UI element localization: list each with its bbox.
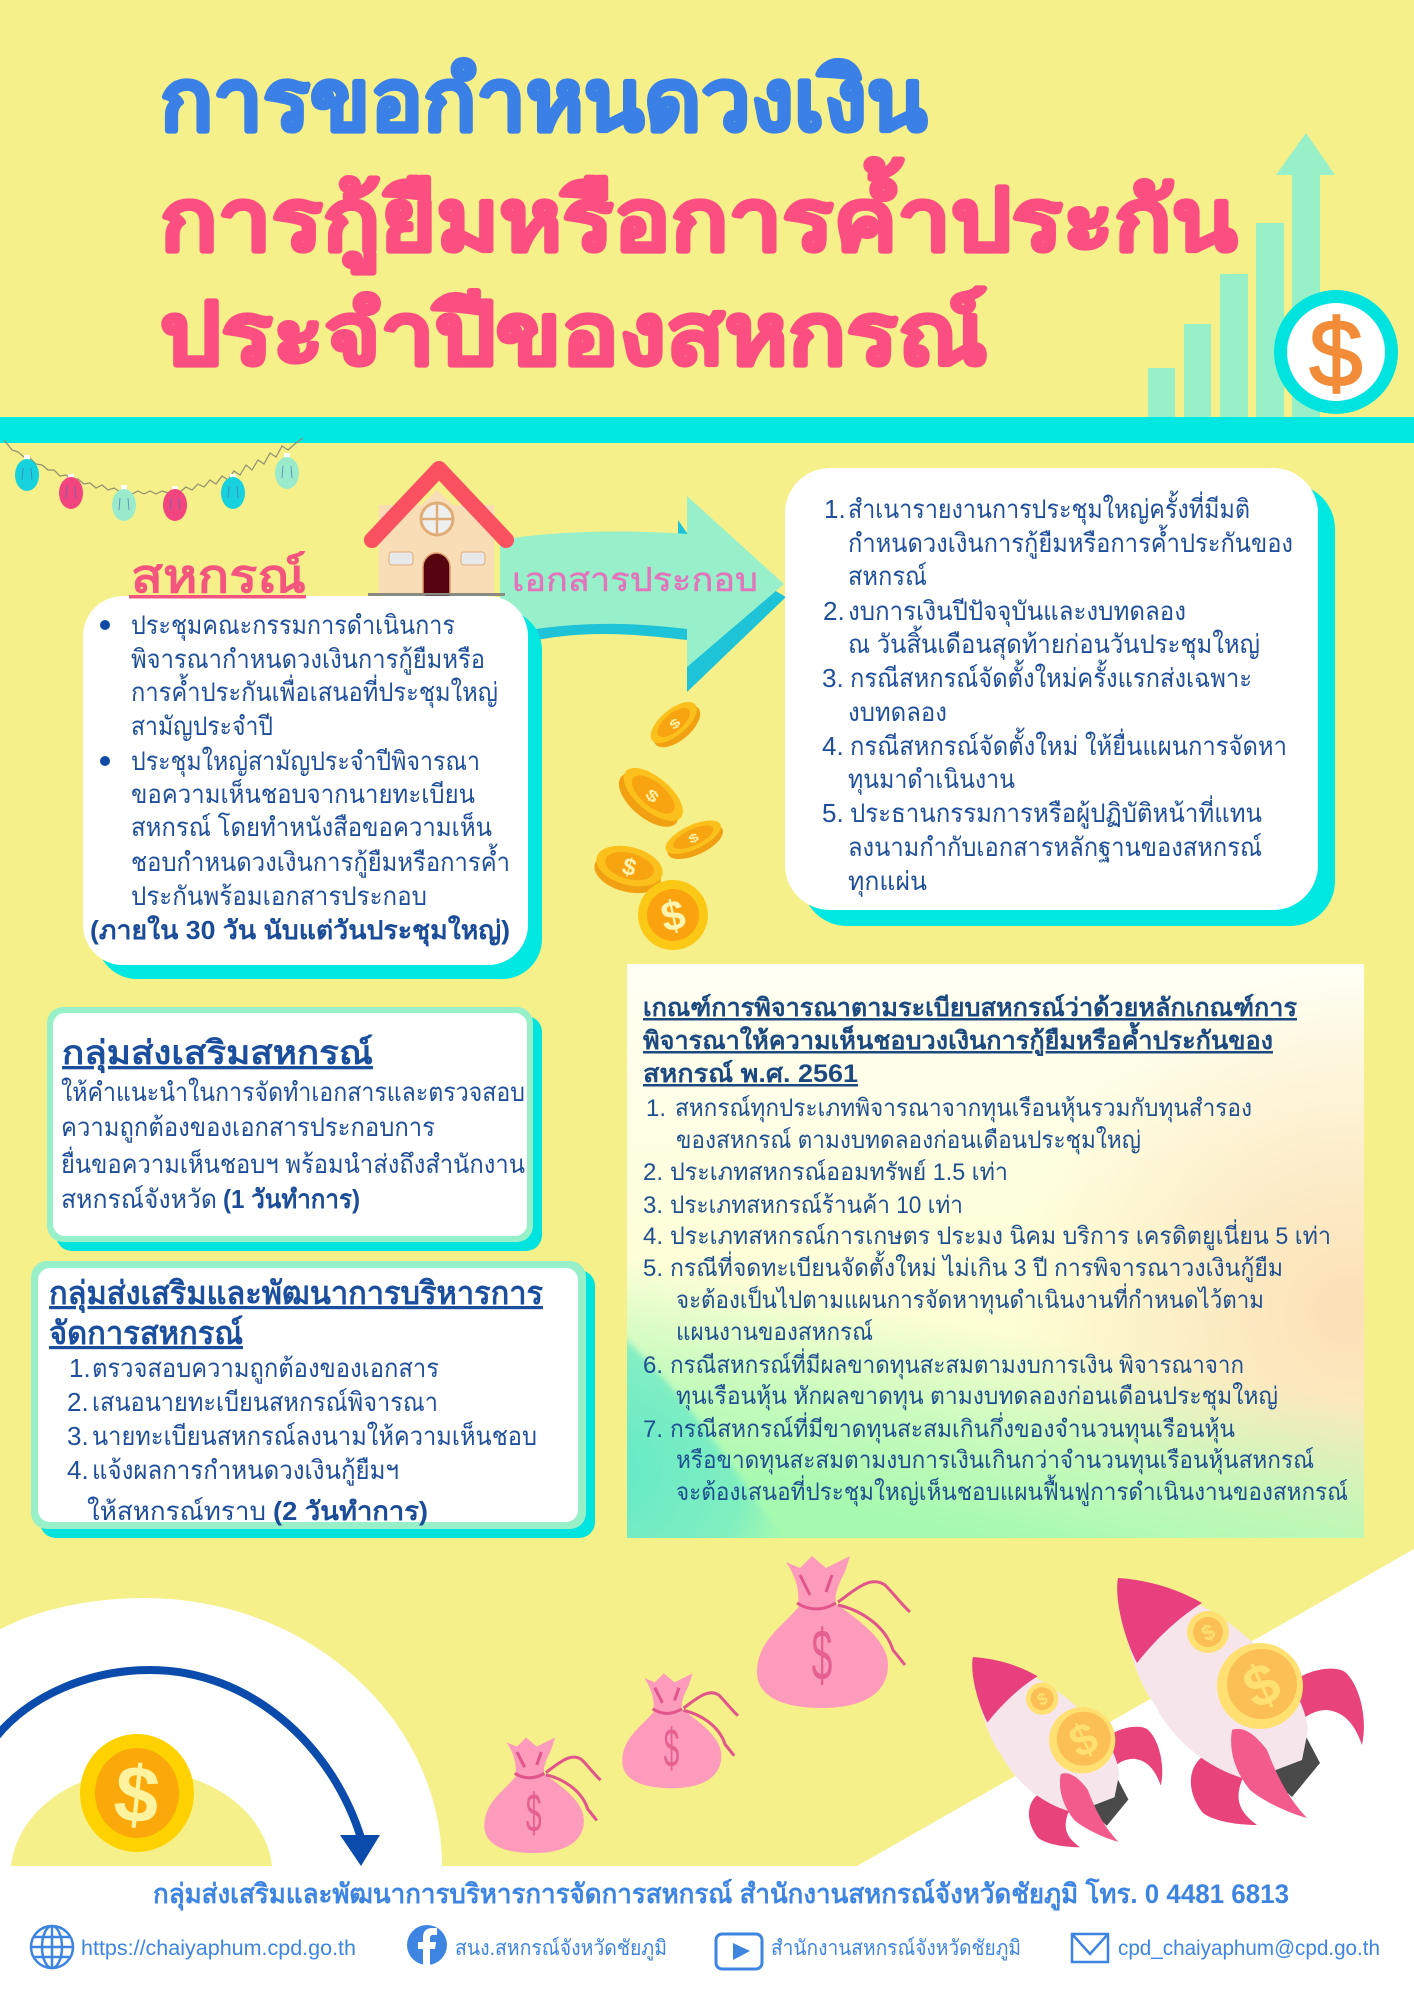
panel list text: 4. [67, 1455, 89, 1485]
bullet list text: พิจารณากำหนดวงเงินการกู้ยืมหรือ [131, 644, 485, 675]
panel: cooperative procedure [83, 596, 542, 979]
money bag small [484, 1738, 601, 1853]
panel heading: กลุ่มส่งเสริมและพัฒนาการบริหารการ [49, 1275, 543, 1314]
falling gold coins: $ [667, 716, 684, 733]
numbered list text: 1. [824, 494, 846, 524]
numbered list text: งบการเงินปีปัจจุบันและงบทดลอง [848, 596, 1186, 627]
title: การขอกำหนดวงเงิน [160, 53, 927, 149]
numbered list text: สำเนารายงานการประชุมใหญ่ครั้งที่มีมติ [848, 490, 1250, 525]
panel body text [61, 1077, 525, 1214]
arrow: documents [500, 496, 786, 692]
icon: facebook [407, 1925, 447, 1966]
bullet list text: ประกันพร้อมเอกสารประกอบ [131, 881, 427, 911]
teal divider band [0, 417, 1414, 443]
rocket small: $ [1062, 1713, 1106, 1768]
icon: globe [31, 1926, 73, 1968]
criteria list: กรณีสหกรณ์ที่มีผลขาดทุนสะสมตามงบการเงิน พิจารณาจาก [670, 1348, 1244, 1380]
bullet list text: สามัญประจำปี [131, 711, 273, 741]
criteria list: จะต้องเป็นไปตามแผนการจัดหาทุนดำเนินงานที่กำหนดไว้ตาม [676, 1283, 1264, 1315]
email address: cpd_chaiyaphum@cpd.go.th [1118, 1937, 1380, 1960]
growth chart icon [1148, 133, 1335, 418]
criteria list: 7. [643, 1416, 663, 1443]
numbered list text: กรณีสหกรณ์จัดตั้งใหม่ ให้ยื่นแผนการจัดหา [850, 727, 1287, 761]
panel body text: สหกรณ์จังหวัด [61, 1184, 217, 1214]
falling gold coins: $ [641, 786, 662, 807]
criteria list: 5. [643, 1255, 663, 1282]
criteria heading [643, 993, 1298, 1088]
panel list text [67, 1353, 537, 1526]
numbered list text: ลงนามกำกับเอกสารหลักฐานของสหกรณ์ [848, 832, 1262, 863]
panel list text: 1. [69, 1353, 91, 1383]
panel list text: (2 วันทำการ) [273, 1496, 428, 1526]
panel: required documents [785, 468, 1335, 926]
numbered list text: กำหนดวงเงินการกู้ยืมหรือการค้ำประกันของ [848, 524, 1293, 559]
bullet list text: (ภายใน 30 วัน นับแต่วันประชุมใหญ่) [90, 915, 510, 947]
criteria list: 1. [646, 1095, 666, 1122]
criteria list: กรณีสหกรณ์ที่มีขาดทุนสะสมเกินกึ่งของจำนวนทุนเรือนหุ้น [670, 1412, 1235, 1444]
criteria list: ประเภทสหกรณ์ร้านค้า 10 เท่า [670, 1191, 963, 1219]
panel heading: จัดการสหกรณ์ [49, 1315, 243, 1351]
website: https://chaiyaphum.cpd.go.th [81, 1937, 356, 1960]
white diagonal background [857, 1549, 1414, 1866]
footer [0, 1866, 1414, 2000]
criteria list: ของสหกรณ์ ตามงบทดลองก่อนเดือนประชุมใหญ่ [676, 1126, 1141, 1155]
criteria list: สหกรณ์ทุกประเภทพิจารณาจากทุนเรือนหุ้นรวมกับทุนสำรอง [675, 1094, 1252, 1123]
falling gold coins [590, 695, 728, 950]
bullet list text: ชอบกำหนดวงเงินการกู้ยืมหรือการค้ำ [131, 843, 510, 878]
youtube channel name: สำนักงานสหกรณ์จังหวัดชัยภูมิ [771, 1936, 1021, 1961]
bullet list text: ประชุมคณะกรรมการดำเนินการ [131, 610, 455, 641]
icon: large gold coin: $ [110, 1748, 164, 1841]
numbered list text [822, 490, 1293, 897]
criteria list: 2. [643, 1159, 663, 1186]
rocket large: $ [1197, 1619, 1219, 1646]
bullet list text [90, 610, 510, 947]
falling gold coins: $ [686, 830, 702, 847]
facebook page name: สนง.สหกรณ์จังหวัดชัยภูมิ [455, 1936, 667, 1961]
numbered list text: 3. [822, 663, 844, 693]
numbered list text: ประธานกรรมการหรือผู้ปฏิบัติหน้าที่แทน [850, 795, 1262, 829]
panel list text: แจ้งผลการกำหนดวงเงินกู้ยืมฯ [92, 1455, 399, 1486]
panel list text: นายทะเบียนสหกรณ์ลงนามให้ความเห็นชอบ [92, 1420, 537, 1451]
numbered list text: ทุกแผ่น [848, 866, 927, 897]
criteria list: 3. [643, 1192, 663, 1219]
numbered list text: 4. [822, 731, 844, 761]
money bag small: $ [526, 1784, 542, 1844]
criteria list: ประเภทสหกรณ์ออมทรัพย์ 1.5 เท่า [670, 1158, 1008, 1186]
title: ประจำปีของสหกรณ์ [160, 287, 987, 383]
icon: house [368, 469, 506, 601]
money bag large: $ [812, 1616, 832, 1696]
money bag medium: $ [664, 1719, 679, 1780]
bullet list text: การค้ำประกันเพื่อเสนอที่ประชุมใหญ่ [131, 673, 498, 708]
panel list text: 3. [67, 1421, 89, 1451]
title [160, 53, 1237, 383]
panel: management development group [31, 1261, 595, 1538]
criteria list: หรือขาดทุนสะสมตามงบการเงินเกินกว่าจำนวนทุนเรือนหุ้นสหกรณ์ [676, 1446, 1314, 1475]
white arch [0, 1598, 442, 1866]
bullet list text: ประชุมใหญ่สามัญประจำปีพิจารณา [131, 746, 480, 777]
panel body text: (1 วันทำการ) [223, 1184, 360, 1214]
numbered list text: ทุนมาดำเนินงาน [848, 764, 1015, 795]
icon: mail [1072, 1934, 1108, 1962]
falling gold coins: $ [619, 853, 640, 882]
bullet list text: สหกรณ์ โดยทำหนังสือขอความเห็น [131, 811, 492, 842]
icon: large gold coin [80, 1734, 194, 1852]
numbered list text: กรณีสหกรณ์จัดตั้งใหม่ครั้งแรกส่งเฉพาะ [850, 659, 1252, 693]
title: การกู้ยืมหรือการค้ำประกัน [160, 157, 1237, 274]
rocket large: $ [1233, 1649, 1290, 1722]
criteria list: ทุนเรือนหุ้น หักผลขาดทุน ตามงบทดลองก่อนเดือนประชุมใหญ่ [676, 1382, 1278, 1411]
numbered list text: สหกรณ์ [848, 561, 927, 591]
criteria list [643, 1094, 1348, 1507]
icon: youtube [716, 1934, 762, 1969]
criteria list: 4. [643, 1223, 663, 1250]
panel heading: กลุ่มส่งเสริมสหกรณ์ [62, 1034, 373, 1074]
icon: dollar coin badge [1274, 290, 1398, 414]
panel list text: ให้สหกรณ์ทราบ [87, 1496, 266, 1526]
rocket large [1117, 1578, 1364, 1825]
heading: cooperative: สหกรณ์ [131, 550, 306, 602]
criteria list: กรณีที่จดทะเบียนจัดตั้งใหม่ ไม่เกิน 3 ปี การพิจารณาวงเงินกู้ยืม [670, 1250, 1283, 1283]
footer contact line: กลุ่มส่งเสริมและพัฒนาการบริหารการจัดการสหกรณ์ สำนักงานสหกรณ์จังหวัดชัยภูมิ โทร. 0 4481 6813 [153, 1877, 1289, 1911]
rocket small: $ [1034, 1688, 1051, 1710]
panel list text: ตรวจสอบความถูกต้องของเอกสาร [92, 1353, 439, 1384]
criteria list: 6. [643, 1352, 663, 1379]
panel heading [49, 1275, 543, 1351]
panel: consideration criteria [610, 964, 1364, 1550]
criteria heading: พิจารณาให้ความเห็นชอบวงเงินการกู้ยืมหรือค้ำประกันของ [643, 1021, 1273, 1057]
icon: dollar coin badge: $ [1309, 300, 1363, 407]
falling gold coins: $ [657, 890, 689, 941]
numbered list text: ณ วันสิ้นเดือนสุดท้ายก่อนวันประชุมใหญ่ [848, 625, 1260, 660]
panel body text: ความถูกต้องของเอกสารประกอบการ [61, 1112, 435, 1143]
money bag large [757, 1556, 910, 1708]
panel: cooperative promotion group [47, 1007, 542, 1251]
criteria list: แผนงานของสหกรณ์ [676, 1318, 873, 1346]
curved arrow [0, 1670, 380, 1866]
criteria list: จะต้องเสนอที่ประชุมใหญ่เห็นชอบแผนฟื้นฟูการดำเนินงานของสหกรณ์ [676, 1474, 1348, 1507]
criteria list: ประเภทสหกรณ์การเกษตร ประมง นิคม บริการ เครดิตยูเนี่ยน 5 เท่า [670, 1219, 1331, 1251]
bullet list text: ขอความเห็นชอบจากนายทะเบียน [131, 778, 475, 809]
string lights [4, 438, 303, 521]
money bag medium [622, 1673, 738, 1788]
panel body text: ให้คำแนะนำในการจัดทำเอกสารและตรวจสอบ [61, 1077, 525, 1107]
criteria heading: สหกรณ์ พ.ศ. 2561 [643, 1059, 858, 1088]
panel list text: เสนอนายทะเบียนสหกรณ์พิจารณา [92, 1387, 438, 1417]
criteria heading: เกณฑ์การพิจารณาตามระเบียบสหกรณ์ว่าด้วยหลักเกณฑ์การ [643, 993, 1298, 1022]
arrow label: เอกสารประกอบ [512, 561, 758, 598]
numbered list text: งบทดลอง [848, 697, 947, 727]
numbered list text: 5. [822, 798, 844, 828]
numbered list text: 2. [823, 596, 845, 626]
panel body text: ยื่นขอความเห็นชอบฯ พร้อมนำส่งถึงสำนักงาน [61, 1146, 525, 1179]
panel list text: 2. [67, 1387, 89, 1417]
rocket small [972, 1657, 1162, 1847]
